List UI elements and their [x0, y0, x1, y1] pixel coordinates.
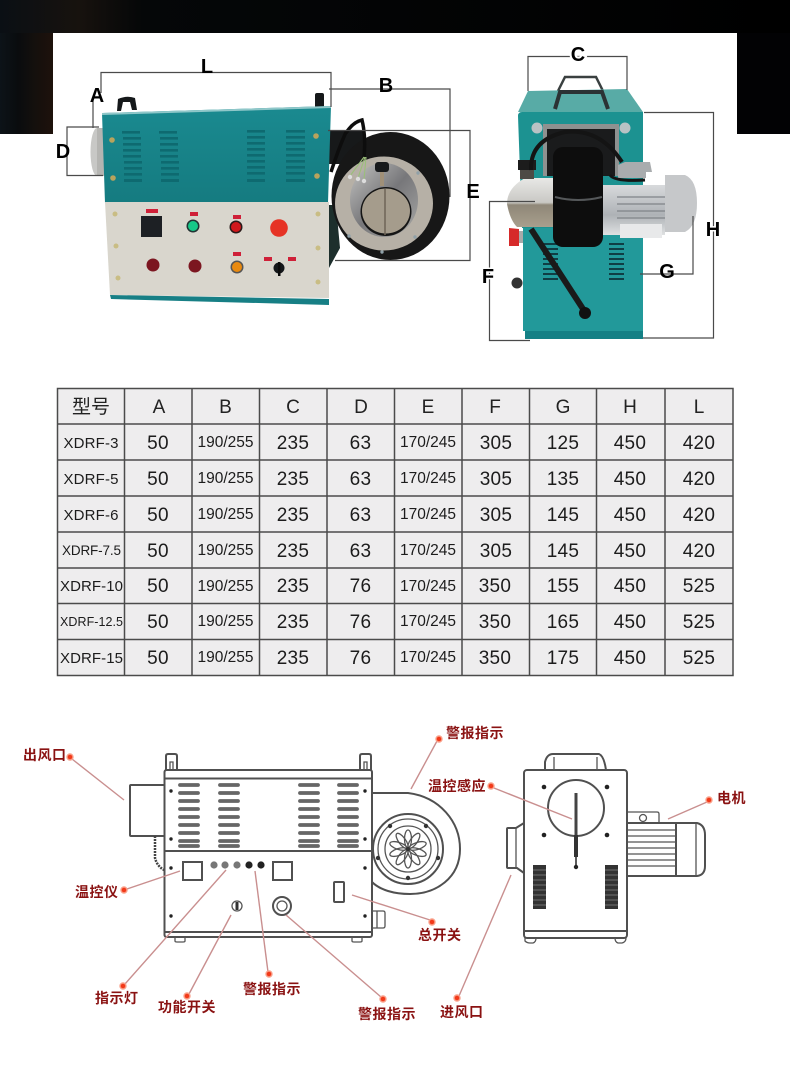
- dimension lines: front view: E: [466, 181, 480, 203]
- row XDRF-7.5: 63: [350, 541, 371, 562]
- row XDRF-12.5: [60, 612, 715, 633]
- row XDRF-3: 450: [614, 433, 646, 454]
- table header row: H: [623, 397, 637, 418]
- row XDRF-7.5: 420: [683, 541, 715, 562]
- callout: 总开关: 总开关: [418, 927, 462, 943]
- callout: 功能开关: [158, 915, 231, 1015]
- row XDRF-7.5: 235: [277, 541, 309, 562]
- dimension lines: side view: [482, 44, 720, 340]
- icon: inlet: [507, 823, 524, 873]
- icon: outlet duct: [90, 128, 105, 176]
- panel: grey control panel: [105, 202, 329, 305]
- row XDRF-3: XDRF-3: [64, 435, 118, 452]
- photo: side view of heater with dimensions: [482, 44, 720, 340]
- row XDRF-6: 305: [480, 505, 512, 526]
- row XDRF-5: 135: [547, 469, 579, 490]
- icon: handles and outlet duct: [130, 754, 371, 870]
- callout: 温控仪: 温控仪: [75, 884, 118, 900]
- table header row: [72, 396, 704, 418]
- row XDRF-12.5: 170/245: [400, 613, 456, 630]
- panel: teal upper housing with louvers: [102, 106, 331, 203]
- row XDRF-6: 190/255: [197, 506, 254, 523]
- table header row: L: [694, 397, 704, 418]
- row XDRF-12.5: 165: [547, 612, 579, 633]
- table header row: B: [219, 397, 232, 418]
- row XDRF-15: 170/245: [400, 649, 456, 666]
- row XDRF-3: 235: [277, 433, 309, 454]
- table header row: 型号: [72, 396, 110, 418]
- row XDRF-10: 235: [277, 576, 309, 597]
- row XDRF-6: 235: [277, 505, 309, 526]
- table header row: E: [422, 397, 434, 418]
- callout: 警报指示 top: 警报指示: [446, 725, 504, 741]
- row XDRF-3: [64, 433, 715, 454]
- row XDRF-15: 175: [547, 648, 579, 669]
- dimension lines: front view: A: [90, 85, 104, 107]
- callout: 出风口: [23, 747, 124, 800]
- row XDRF-7.5: XDRF-7.5: [62, 543, 121, 558]
- icon: top handle and cabinet top: [518, 77, 643, 112]
- row XDRF-7.5: 305: [480, 541, 512, 562]
- icon: silver inlet cylinder: [507, 160, 555, 227]
- callout: 温控感应: [428, 778, 572, 819]
- row XDRF-6: 63: [350, 505, 371, 526]
- icon: emergency stop and knob: [509, 228, 523, 288]
- callout: 总开关: [352, 895, 462, 943]
- dimension lines: front view: B: [379, 75, 393, 97]
- photo: front view of heater with dimensions: [56, 56, 480, 305]
- row XDRF-6: 450: [614, 505, 646, 526]
- row XDRF-7.5: 170/245: [400, 542, 456, 559]
- callout: 警报指示 lower right: 警报指示: [358, 1006, 416, 1022]
- row XDRF-15: 525: [683, 648, 715, 669]
- row XDRF-5: 305: [480, 469, 512, 490]
- icon: electric motor: [603, 162, 697, 238]
- row XDRF-12.5: 450: [614, 612, 646, 633]
- row XDRF-15: 450: [614, 648, 646, 669]
- row XDRF-3: 63: [350, 433, 371, 454]
- row XDRF-10: 525: [683, 576, 715, 597]
- panel: side cabinet: [524, 754, 627, 943]
- row XDRF-6: XDRF-6: [64, 507, 118, 524]
- row XDRF-3: 420: [683, 433, 715, 454]
- row XDRF-15: XDRF-15: [60, 650, 123, 667]
- icon: indicator buttons: [146, 212, 296, 276]
- row XDRF-15: 235: [277, 648, 309, 669]
- row XDRF-3: 170/245: [400, 434, 456, 451]
- row XDRF-10: [60, 576, 715, 597]
- row XDRF-7.5: 145: [547, 541, 579, 562]
- row XDRF-6: 170/245: [400, 506, 456, 523]
- dimension lines: front view: L: [201, 56, 213, 78]
- callout: 功能开关: 功能开关: [158, 999, 216, 1015]
- row XDRF-5: 170/245: [400, 470, 456, 487]
- line drawing: side view: [507, 754, 705, 943]
- row XDRF-15: 76: [350, 648, 371, 669]
- row XDRF-5: 420: [683, 469, 715, 490]
- row XDRF-10: 50: [147, 576, 169, 597]
- panel: cabinet outline: [164, 770, 385, 942]
- icon: louver columns: [180, 785, 357, 846]
- row XDRF-6: 420: [683, 505, 715, 526]
- dimension lines: side view: C: [571, 44, 585, 66]
- icon: fan housing and impeller: [372, 793, 460, 894]
- icon: black carry handles: [117, 93, 324, 111]
- row XDRF-12.5: 190/255: [197, 613, 254, 630]
- line drawing: front view: [130, 754, 460, 942]
- dimension lines: side view: H: [706, 219, 720, 241]
- row XDRF-10: 350: [479, 576, 511, 597]
- callout: 温控仪: [75, 871, 180, 900]
- row XDRF-15: 50: [147, 648, 169, 669]
- row XDRF-3: 190/255: [197, 434, 254, 451]
- table header row: G: [556, 397, 570, 418]
- table header row: A: [153, 397, 166, 418]
- row XDRF-5: 235: [277, 469, 309, 490]
- callout: 警报指示 lower centre: [243, 871, 301, 997]
- row XDRF-7.5: 190/255: [197, 542, 254, 559]
- callout: 警报指示 lower centre: 警报指示: [243, 981, 301, 997]
- specification table: [58, 388, 733, 676]
- row XDRF-12.5: XDRF-12.5: [60, 615, 123, 629]
- row XDRF-12.5: 235: [277, 612, 309, 633]
- icon: panel controls: [183, 861, 344, 915]
- row XDRF-12.5: 525: [683, 612, 715, 633]
- row XDRF-3: 50: [147, 433, 169, 454]
- row XDRF-3: 125: [547, 433, 579, 454]
- callout: 出风口: 出风口: [23, 747, 66, 763]
- dimension lines: side view: G: [659, 261, 675, 283]
- callout: 电机: 电机: [717, 790, 746, 806]
- icon: motor: [627, 812, 705, 876]
- row XDRF-7.5: 450: [614, 541, 646, 562]
- icon: temperature controller: [141, 209, 162, 237]
- row XDRF-5: 190/255: [197, 470, 254, 487]
- callout: 进风口: [440, 875, 511, 1020]
- row XDRF-7.5: 50: [147, 541, 169, 562]
- dimension lines: front view: [56, 56, 480, 260]
- dimension lines: side view: F: [482, 266, 494, 288]
- row XDRF-12.5: 50: [147, 612, 169, 633]
- table header row: F: [489, 397, 501, 418]
- callout: 指示灯: [95, 870, 226, 1006]
- row XDRF-10: 170/245: [400, 578, 456, 595]
- row XDRF-15: [60, 648, 715, 669]
- row XDRF-5: 63: [350, 469, 371, 490]
- row XDRF-10: 450: [614, 576, 646, 597]
- callout: 进风口: 进风口: [440, 1004, 484, 1020]
- callout: 电机: [668, 790, 746, 819]
- callout: 警报指示 lower right: [286, 915, 416, 1022]
- table header row: C: [286, 397, 300, 418]
- row XDRF-6: 145: [547, 505, 579, 526]
- row XDRF-12.5: 350: [479, 612, 511, 633]
- dimension lines: front view: D: [56, 141, 70, 163]
- row XDRF-10: XDRF-10: [60, 578, 123, 595]
- dark page background band: [0, 0, 790, 134]
- row XDRF-5: [64, 469, 715, 490]
- callout: 指示灯: 指示灯: [95, 990, 138, 1006]
- table header row: D: [354, 397, 368, 418]
- row XDRF-10: 76: [350, 576, 371, 597]
- row XDRF-6: 50: [147, 505, 169, 526]
- callout: 温控感应: 温控感应: [428, 778, 486, 794]
- row XDRF-5: 50: [147, 469, 169, 490]
- row XDRF-15: 350: [479, 648, 511, 669]
- row XDRF-7.5: [62, 541, 715, 562]
- row XDRF-5: 450: [614, 469, 646, 490]
- row XDRF-10: 155: [547, 576, 579, 597]
- row XDRF-3: 305: [480, 433, 512, 454]
- row XDRF-6: [64, 505, 715, 526]
- row XDRF-12.5: 76: [350, 612, 371, 633]
- row XDRF-5: XDRF-5: [64, 471, 118, 488]
- callout: 警报指示 top: [411, 725, 504, 789]
- icon: centrifugal fan housing: [327, 120, 450, 268]
- icon: black fan wheel with cables: [531, 132, 645, 319]
- row XDRF-15: 190/255: [197, 649, 254, 666]
- row XDRF-10: 190/255: [197, 578, 254, 595]
- panel: teal cabinet body: [518, 112, 643, 339]
